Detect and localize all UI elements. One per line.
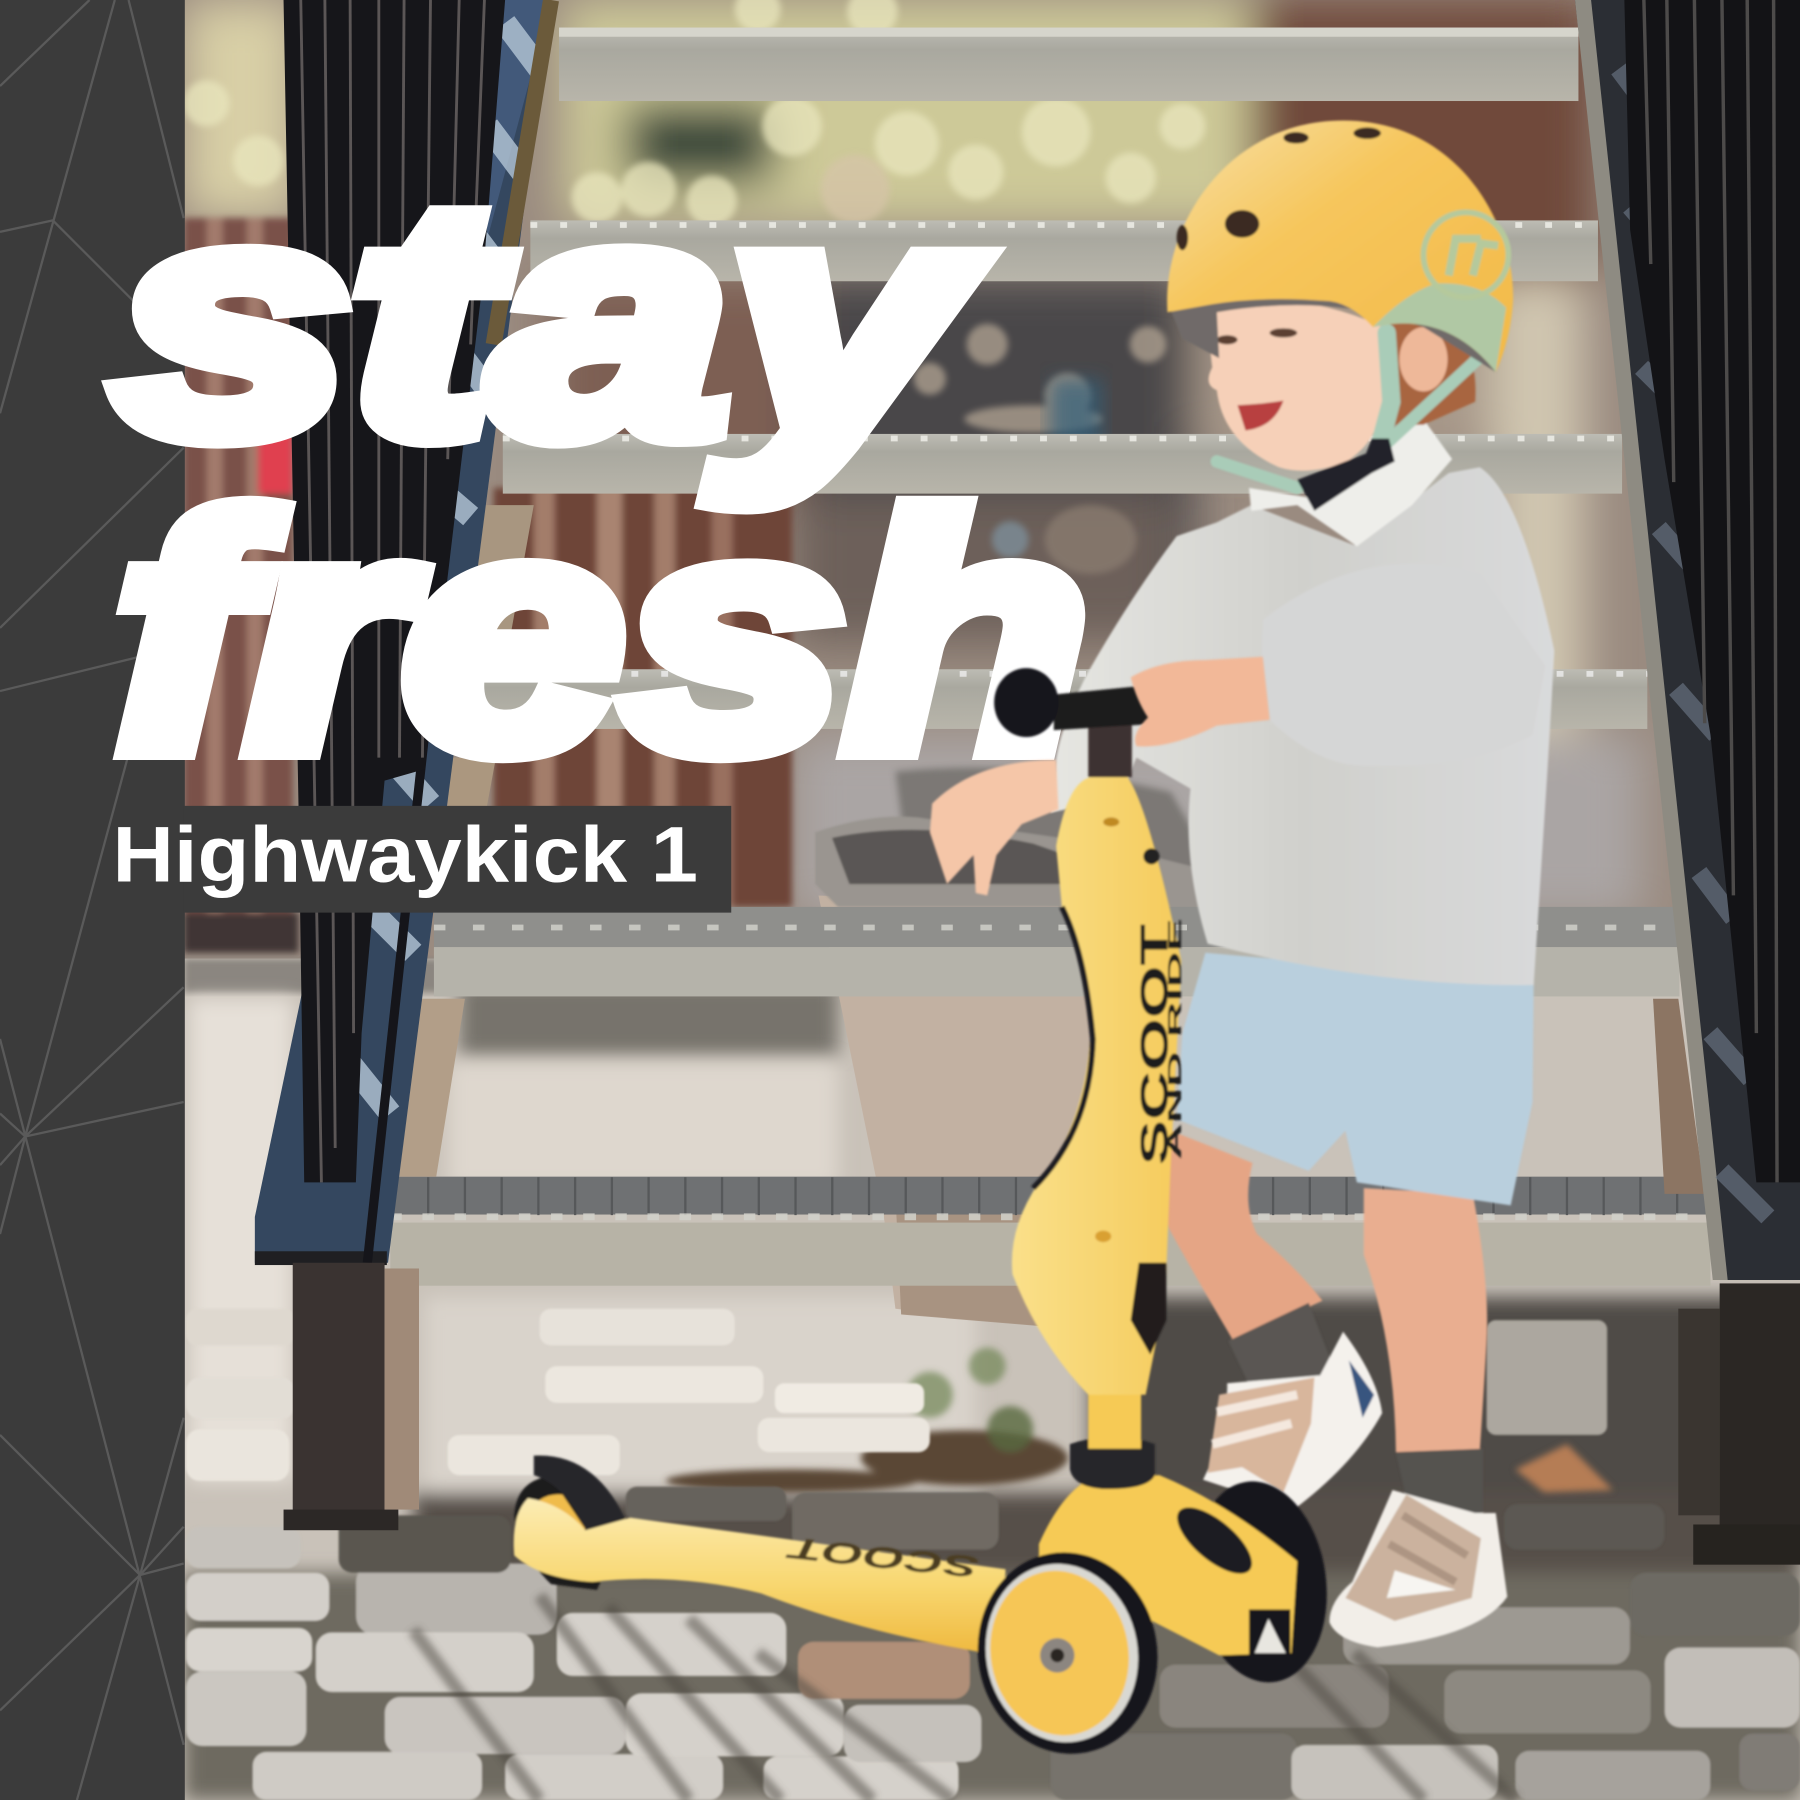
subtitle bar — [184, 806, 731, 913]
left stair stringer — [255, 0, 551, 1265]
stair tread 4 — [482, 669, 1647, 729]
near sock — [1228, 1303, 1335, 1389]
eye — [1217, 335, 1238, 344]
brand badge — [1167, 1496, 1262, 1585]
stair tread 5 — [434, 907, 1679, 996]
stair tread 3 — [503, 434, 1622, 494]
chin straps — [1217, 333, 1479, 488]
metal stair treads — [390, 28, 1710, 1286]
foliage bokeh — [184, 0, 1205, 226]
subtitle: Highwaykick 1 — [113, 810, 698, 899]
headline line: fresh: fresh — [115, 447, 1088, 819]
face — [1209, 301, 1394, 471]
child right hand — [1131, 657, 1270, 746]
helmet liner — [1171, 294, 1496, 372]
child left hand — [930, 760, 1058, 895]
rear fender — [534, 1455, 629, 1533]
helmet shell — [1167, 121, 1513, 372]
stair braces — [393, 999, 465, 1177]
handlebar knob — [994, 668, 1058, 737]
stem shadow edge — [1033, 907, 1093, 1188]
right stair stringer — [1575, 0, 1800, 1280]
cobblestone ground — [184, 959, 1800, 1800]
far leg — [1364, 1188, 1487, 1452]
steering collar — [1070, 1437, 1155, 1489]
stem latch — [1131, 1263, 1166, 1355]
far sock — [1396, 1449, 1483, 1518]
rear wheel — [514, 1475, 626, 1590]
right post — [1678, 1283, 1800, 1565]
left black railing — [284, 0, 505, 1182]
mouth — [1238, 401, 1283, 430]
deck — [514, 1498, 1006, 1655]
helmet buckle — [1297, 439, 1395, 511]
helmet logo ring — [1423, 212, 1508, 297]
far shoe — [1329, 1490, 1507, 1647]
stair tread 1 — [559, 28, 1578, 101]
far front wheel — [1182, 1473, 1339, 1691]
cobble stones — [186, 1309, 1800, 1800]
stem branding small: AND RIDE — [1164, 918, 1185, 1159]
stem holes — [1095, 817, 1159, 1242]
stair tread 2 — [530, 220, 1598, 281]
sweater arm fold — [1262, 564, 1545, 766]
hair and neck — [1378, 320, 1475, 425]
safety sticker — [1249, 1609, 1290, 1667]
left post — [284, 1263, 419, 1530]
scooter — [514, 668, 1339, 1768]
sweater — [1050, 467, 1554, 985]
shorts — [1177, 953, 1534, 1205]
stair tread 6 — [390, 1177, 1710, 1286]
near shoe — [1203, 1332, 1382, 1510]
right black railing — [1624, 0, 1800, 1182]
planter pot — [815, 767, 1217, 1326]
near leg — [1161, 1131, 1322, 1342]
helmet logo glyph — [1449, 239, 1498, 276]
headline — [115, 133, 1088, 819]
stem branding: SCOOT — [1133, 924, 1176, 1165]
handlebar stem — [1088, 723, 1132, 777]
rear wheel hub — [526, 1494, 585, 1529]
deck lettering: SCOOT — [784, 1530, 980, 1583]
handlebar — [1054, 683, 1171, 730]
helmet vents — [1177, 127, 1381, 250]
helmet mint band — [1373, 283, 1506, 372]
stem column — [1088, 1391, 1141, 1449]
left panel — [0, 0, 185, 1800]
background bike bokeh — [914, 324, 1166, 574]
dirt and weeds — [666, 1348, 1613, 1492]
blurred backdrop foliage — [184, 0, 1642, 918]
front wheel — [962, 1538, 1173, 1768]
sunlit shadow stripes — [413, 1596, 1515, 1800]
collar — [1249, 419, 1452, 546]
left wooden fence — [184, 218, 1659, 1194]
headline line: stay: stay — [115, 133, 987, 507]
child — [1050, 121, 1554, 1647]
main stem — [1012, 777, 1181, 1395]
ear — [1399, 327, 1448, 391]
front body — [1039, 1475, 1297, 1655]
eye — [1270, 328, 1297, 338]
